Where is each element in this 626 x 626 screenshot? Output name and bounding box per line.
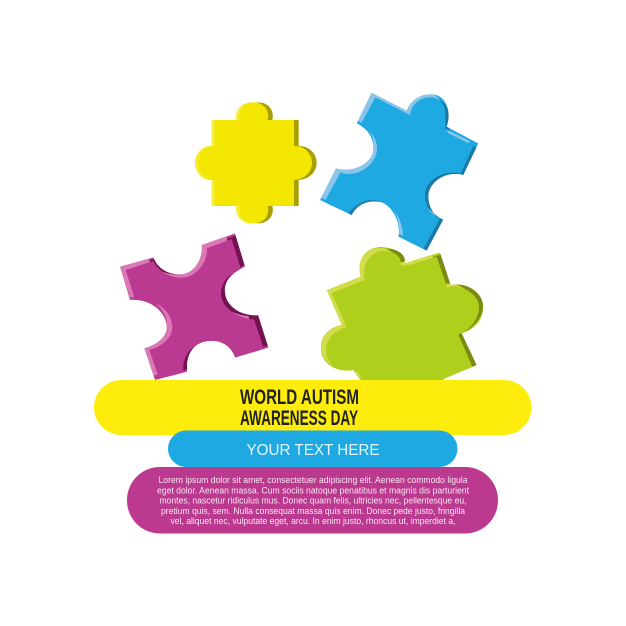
yellow title band (94, 380, 532, 435)
icon: blue puzzle piece (320, 93, 478, 251)
icon: green puzzle piece (321, 247, 483, 385)
body text: eget dolor. Aenean massa. Cum sociis natoque penatibus et magnis dis parturient (157, 485, 469, 495)
body text: pretium quis, sem. Nulla consequat massa quis enim. Donec pede justo, fringilla (161, 506, 465, 516)
body text: vel, aliquet nec, vulputate eget, arcu. In enim justo, rhoncus ut, imperdiet a, (170, 516, 456, 526)
icon: yellow puzzle piece (195, 102, 317, 223)
body text: montes, nascetur ridiculus mus. Donec quam felis, ultricies nec, pellentesque eu, (160, 496, 466, 506)
icon: magenta puzzle piece (120, 233, 268, 380)
body text: Lorem ipsum dolor sit amet, consectetuer adipiscing elit. Aenean commodo ligula (158, 475, 468, 485)
title: WORLD AUTISM (240, 385, 359, 409)
title: AWARENESS DAY (240, 406, 358, 430)
blue subtitle pill (168, 430, 458, 467)
title (240, 385, 359, 430)
magenta text pill (127, 467, 498, 534)
blue subtitle pill: YOUR TEXT HERE (246, 442, 380, 459)
body text (157, 475, 469, 526)
